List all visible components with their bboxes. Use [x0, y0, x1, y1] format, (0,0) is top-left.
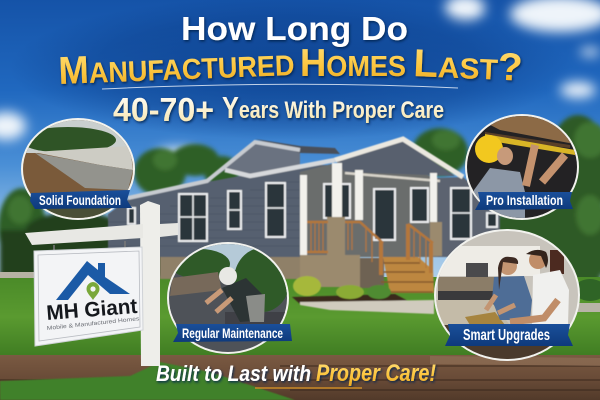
- porch interior: [300, 163, 438, 257]
- windows: [128, 183, 497, 241]
- kitchen photo: [434, 229, 581, 365]
- logo: tagline: Mobile & Manufactured Homes: [47, 316, 140, 332]
- real estate sign panel: [34, 247, 143, 346]
- foreground grass: [0, 362, 295, 400]
- walkway: [300, 300, 434, 314]
- roof cap: [255, 139, 340, 154]
- mulch bed: [292, 294, 412, 304]
- year range: 40-70+: [113, 91, 214, 128]
- tagline gold part: Proper Care!: [316, 360, 436, 387]
- sign post: [25, 201, 178, 366]
- stone base: [160, 257, 350, 279]
- upper gable: [207, 142, 300, 182]
- ribbon: regular maintenance: [173, 324, 292, 342]
- ribbon: regular maintenance: Regular Maintenance: [182, 325, 283, 341]
- title underline: [102, 84, 458, 89]
- maintenance photo: [169, 244, 287, 352]
- circle: solid foundation: [20, 115, 136, 225]
- circle: pro installation: [465, 114, 579, 220]
- word: manufactured: MANUFACTURED: [58, 41, 295, 93]
- circle: regular maintenance: [165, 240, 295, 355]
- porch roof fascia: [335, 139, 463, 177]
- logo: house roof: [56, 261, 130, 300]
- title line one: How Long Do: [181, 10, 408, 47]
- title line two: [58, 41, 523, 93]
- logo: company name: MH Giant: [46, 295, 138, 325]
- hard hat: [475, 135, 503, 163]
- logo: location pin: [86, 282, 100, 300]
- circle: smart upgrades: [434, 229, 581, 365]
- main roof fascia: [128, 142, 300, 198]
- porch gable: [335, 141, 455, 176]
- ribbon: solid foundation: [30, 190, 132, 209]
- ribbon: solid foundation: Solid Foundation: [39, 192, 121, 208]
- word: last: LAST?: [413, 42, 523, 90]
- subtitle words: Years With Proper Care: [222, 90, 444, 125]
- arm stub: [160, 223, 178, 237]
- ribbon: pro installation: Pro Installation: [486, 192, 563, 208]
- porch columns: [300, 163, 437, 255]
- porch railing: [307, 222, 433, 275]
- tagline white part: Built to Last with: [156, 361, 311, 386]
- stone piers: [300, 217, 442, 288]
- woman: [486, 257, 532, 320]
- footer accent line: [255, 387, 362, 389]
- manufactured home: [108, 139, 500, 314]
- ribbon: pro installation: [475, 192, 573, 210]
- foundation photo: [23, 120, 133, 218]
- ribbon: smart upgrades: Smart Upgrades: [463, 327, 550, 344]
- sky background: [0, 0, 600, 300]
- sign hooks: [54, 241, 125, 258]
- lawn: [0, 272, 600, 357]
- man: [510, 250, 569, 325]
- worker shirt: [474, 168, 525, 218]
- post: [140, 201, 160, 366]
- wood plank band: [0, 355, 600, 400]
- background trees: [0, 115, 600, 287]
- footer tagline: [156, 360, 436, 387]
- right wall: [436, 177, 500, 257]
- ribbon: smart upgrades: [445, 324, 573, 346]
- subtitle: [113, 90, 444, 128]
- installation photo: [467, 116, 577, 218]
- spirit level: [485, 134, 575, 155]
- house siding: [108, 165, 345, 257]
- word: homes: HOMES: [300, 42, 406, 85]
- sign arm: [25, 224, 143, 245]
- stairs: [383, 257, 434, 293]
- worker: [206, 267, 265, 322]
- landscaping shrubs: [293, 276, 391, 299]
